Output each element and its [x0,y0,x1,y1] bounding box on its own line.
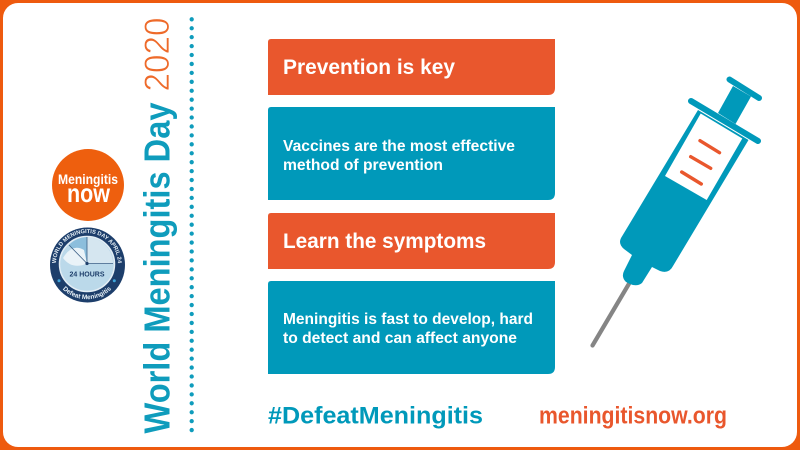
badge: World Meningitis Day clock [50,228,125,302]
panel: Vaccines: method of prevention [283,157,443,174]
badge: World Meningitis Day clock: WORLD MENINGITIS DAY APRIL 24 [52,229,122,264]
panel: Meningitis is fast [268,281,555,374]
panel: Vaccines [268,107,555,200]
panel: Prevention is key [268,39,555,95]
hashtag: #DefeatMeningitis [268,402,483,430]
website: meningitisnow.org [539,402,727,430]
logo: Meningitis Now: Meningitis [58,172,118,187]
panel: Meningitis is fast: Meningitis is fast to develop, hard [283,311,533,328]
panel: Meningitis is fast: to detect and can affect anyone [283,330,517,347]
panel: Learn the symptoms: Learn the symptoms [283,230,486,253]
vertical title: 2020 [138,18,177,92]
panel: Vaccines: Vaccines are the most effective [283,138,515,155]
logo: Meningitis Now: now [67,178,111,208]
panel: Learn the symptoms [268,213,555,269]
logo: Meningitis Now [52,149,124,221]
badge: World Meningitis Day clock: 24 HOURS [69,272,105,278]
vertical title: World Meningitis Day [136,102,178,434]
panel: Prevention is key: Prevention is key [283,56,455,79]
badge: World Meningitis Day clock: Defeat Meningitis [62,286,111,300]
icon: syringe [592,80,759,346]
